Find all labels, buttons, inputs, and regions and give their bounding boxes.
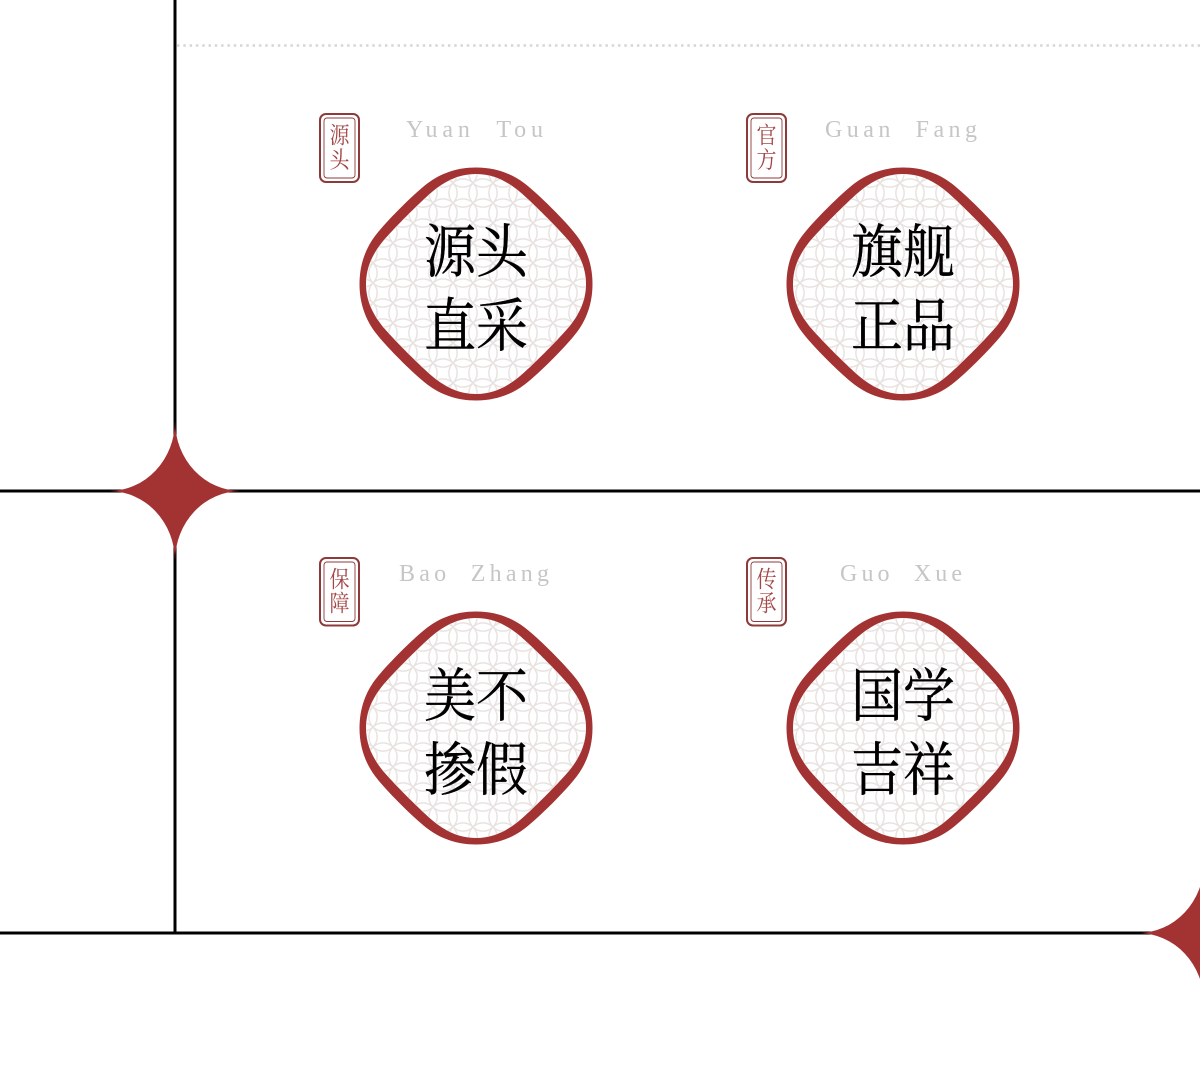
diamond badge xyxy=(360,612,592,844)
panel: 美不掺假 xyxy=(320,558,592,844)
vertical frame line xyxy=(174,0,176,934)
seal: 源头 xyxy=(320,114,359,182)
seal: 官方: 方 xyxy=(757,147,776,173)
heading text xyxy=(851,664,955,803)
middle horizontal line xyxy=(0,490,1200,492)
dotted top rule xyxy=(177,44,1200,47)
seal: 传承: 传 xyxy=(757,567,776,592)
seal: 保障 xyxy=(320,558,359,626)
pinyin label: Yuan Tou xyxy=(406,117,543,143)
panel: 源头直采 xyxy=(320,114,592,400)
pinyin label: Bao Zhang xyxy=(399,561,549,587)
heading text: 掺假 xyxy=(424,738,528,803)
pinyin label: Guan Fang xyxy=(825,117,977,143)
heading text: 国学 xyxy=(851,664,955,729)
seal: 官方: 官 xyxy=(757,123,776,148)
heading text: 源头 xyxy=(424,220,529,285)
seal: 源头: 源 xyxy=(330,123,350,148)
bottom horizontal line xyxy=(0,932,1200,934)
seal: 保障: 保 xyxy=(330,567,349,592)
heading text: 吉祥 xyxy=(851,738,955,803)
heading text: 直采 xyxy=(424,294,528,359)
heading text: 旗舰 xyxy=(851,220,955,285)
heading text: 正品 xyxy=(851,294,955,359)
seal: 保障: 障 xyxy=(330,591,349,616)
pinyin label: Guo Xue xyxy=(840,561,962,587)
seal: 官方 xyxy=(747,114,786,182)
diamond badge xyxy=(786,168,1020,400)
diamond badge xyxy=(786,612,1020,844)
diamond badge xyxy=(360,168,592,400)
panel: 国学吉祥 xyxy=(747,558,1020,844)
seal: 源头: 头 xyxy=(330,147,350,173)
heading text xyxy=(424,664,528,803)
icon: four-point star at right edge xyxy=(1138,863,1200,1003)
heading text: 美不 xyxy=(424,664,528,729)
heading text xyxy=(851,220,955,359)
seal: 传承 xyxy=(747,558,786,626)
panel: 旗舰正品 xyxy=(747,114,1020,400)
icon: four-point star at line crossing xyxy=(109,421,241,561)
heading text xyxy=(424,220,529,359)
seal: 传承: 承 xyxy=(757,591,777,616)
